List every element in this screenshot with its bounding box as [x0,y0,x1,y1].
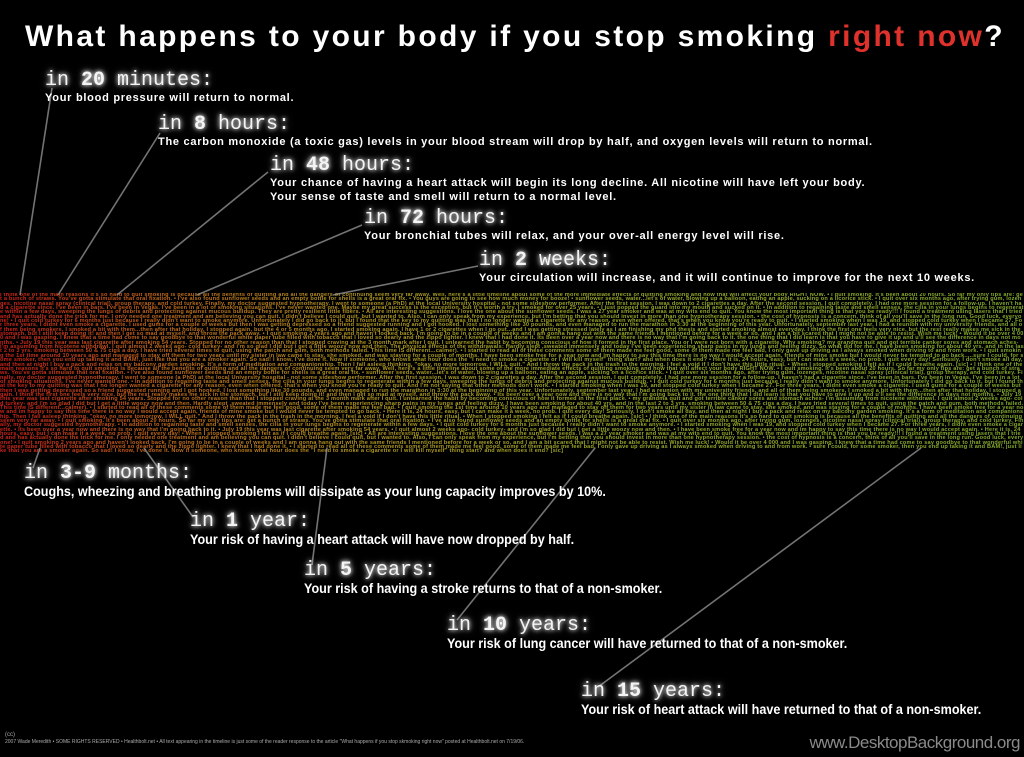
milestone: 15 years: in 15 years: [581,680,725,703]
milestone: 1 year: in 1 year: [190,510,310,533]
milestone: 15 years: Your risk of heart attack will have returned to that of a non-smoker. [581,701,981,717]
milestone: 48 hours: Your chance of having a heart attack will begin its long decline. All nicotine will have left your body. [270,177,865,189]
milestone: 1 year [188,508,574,547]
footer credits: (cc) [5,732,15,738]
milestone: 48 hours: in 48 hours: [270,154,414,177]
milestone: 15 years [579,678,981,717]
milestone: 10 years: in 10 years: [447,614,591,637]
milestone: 20 minutes [43,66,294,104]
milestone: 3-9 months: in 3-9 months: [24,462,192,485]
milestone: 72 hours: in 72 hours: [364,207,508,230]
milestone: 20 minutes: in 20 minutes: [45,69,213,92]
milestone: 2 weeks: in 2 weeks: [479,249,611,272]
milestone: 20 minutes: Your blood pressure will return to normal. [45,92,294,104]
watermark: www.DesktopBackground.org [809,733,1020,752]
milestone: 72 hours [362,204,785,242]
footer credits: 2007 Wade Meredith • SOME RIGHTS RESERVED • Healthbolt.net • All text appearing in the timeline is just some of the reader response to the article "What happens if you stop skmoking right now" posted at Healthbolt.net on 7/19/06. [5,739,524,745]
milestone: 8 hours: The carbon monoxide (a toxic gas) levels in your blood stream will drop by half, and oxygen levels will return to normal. [158,136,873,148]
milestone: 10 years [445,612,847,651]
milestone: 2 weeks: Your circulation will increase, and it will continue to improve for the next 10 weeks. [479,272,975,284]
milestone: 5 years [302,556,662,596]
milestone: 48 hours: Your sense of taste and smell will return to a normal level. [270,191,617,203]
milestone: 48 hours [268,152,865,203]
milestone: 3-9 months: Coughs, wheezing and breathing problems will dissipate as your lung capacity improves by 10%. [24,483,606,499]
milestone: 1 year: Your risk of having a heart attack will have now dropped by half. [190,531,574,547]
footer credits [5,732,524,745]
milestone: 8 hours [156,110,873,148]
milestone: 10 years: Your risk of lung cancer will have returned to that of a non-smoker. [447,635,847,651]
milestone: 3-9 months [22,460,606,499]
milestone: 72 hours: Your bronchial tubes will relax, and your over-all energy level will rise. [364,230,785,242]
milestone: 2 weeks [477,246,975,284]
milestone: 8 hours: in 8 hours: [158,113,290,136]
title: What happens to your body if you stop smoking right now? [25,20,1005,53]
comments text band: I think one of the main reasons it's so hard to quit smoking is because all the benefits of quitting and all the dangers of continuing seem very far away. Well, here's a little timeline about some of the more immediate effects of quitting smoking and how that will affect your body RIGHT NOW. • I quit smoking. It's been about 20 hours. So far my only tips are: get a bunch of straws. You've gotta stimulate that oral fixation. • I've also found sunflower seeds and an empty bottle for shells is a great oral fix. • You guys are going to see how much money for booze! • sunflower seeds, water...let's of water, blowing up a balloon, eating an apple, sucking on a licorice stick. • I quit over six months ago, after trying gum, lozenges, nicotine nasal spray (clinical trial), group therapy, and cold turkey. Finally, my doctor suggested hypnotherapy. I went to someone (a PhD) at the local University hospital - not some sideshow performer. After the first session, I was down to 2 cigarettes a day. After the second session, I quit completely. I had one more session for a follow-up. I haven't had a cigarette since. I've been in bars. I've been in Vegas. I've been in a lot of smoking situations. I've never wanted one. Maybe my great success is the exception, but it's worth a try. I smoked for over 25 years. • I just popped the guard into my mouth and sucked on it. • In addition to regaining taste and smell senses, the cilia in your lungs begins to regenerate within a few days, sweeping the lungs of debris and protecting against mucous buildup. They are pretty resilient little fibers. • All are interesting suggestions. I love the one about the sunflower seeds. I was a 27 year smoker and was at my wits end to quit. You know the most important thing is that you be ready!!! I found a treatment using lasers that I tried and has actually done the trick for me. I only needed one treatment and am believing you can quit. I didn't believe I could quit, but I wanted to. Also, I can only speak from my experience, but I'm betting that you should invest in more than one hypnotherapy session. • the cost of hypnosis is a concern, think of all you'll save in the long run. Good luck, everyone! • I quit cold turkey for 6 months just because I really didn't want to smoke anymore. Unfortunately I did go back to it, but I found that the key to my quitting was that I no longer wanted a cigarette for any reason, even when offered, that's when you know you're ready to quit. • I started smoking when I was 19, and stopped cold turkey when I became 27. For three years, I didnt even smoke a cigarette. I used gums for a couple of weeks but then I was getting depressed so a friend suggested running and I got hooked. I lost something like 30 pounds, and even managed to run the marathon in 3:30 at the beginning of this year. Unfortunately, september last year, I had a reunion with my university friends, and all of them being smokers, I smoked a bit with them...then after that holiday, I stopped again, but the 4 or 5 months ago, I started smoking again. I have 1 or 2 cigarettes when I go out...and I was getting stressed lately as I am finishing my phd thesis and started smoking almost everyday. I think the first one feels very nice, but the rest really makes me sick in the stomach, but I still keep doing it! and then I get so mad at myself, and throw the pack away. • I quit smoking 2 years ago and haven't looked back. I'm going to be in a couple of weeks and I am gonna hang out with the same friends I mentioned before for a week or so, and I am a bit scared that I might not be able to resist. Wish me luck! • Would it be over 4 000 and I was gasping. I knew that a time had come to say goodbye to that wonderful white paper tube filled with tobacco that I loved so dearly and the zippo lighter. I knew that I had done it. Its been over a year now and there is no way that I'm going back to it. the one thing that I did learn is that you have to give it up and u'll see the difference [0,293,1024,454]
milestone: 5 years: Your risk of having a stroke returns to that of a non-smoker. [304,580,662,596]
milestone: 5 years: in 5 years: [304,559,436,582]
